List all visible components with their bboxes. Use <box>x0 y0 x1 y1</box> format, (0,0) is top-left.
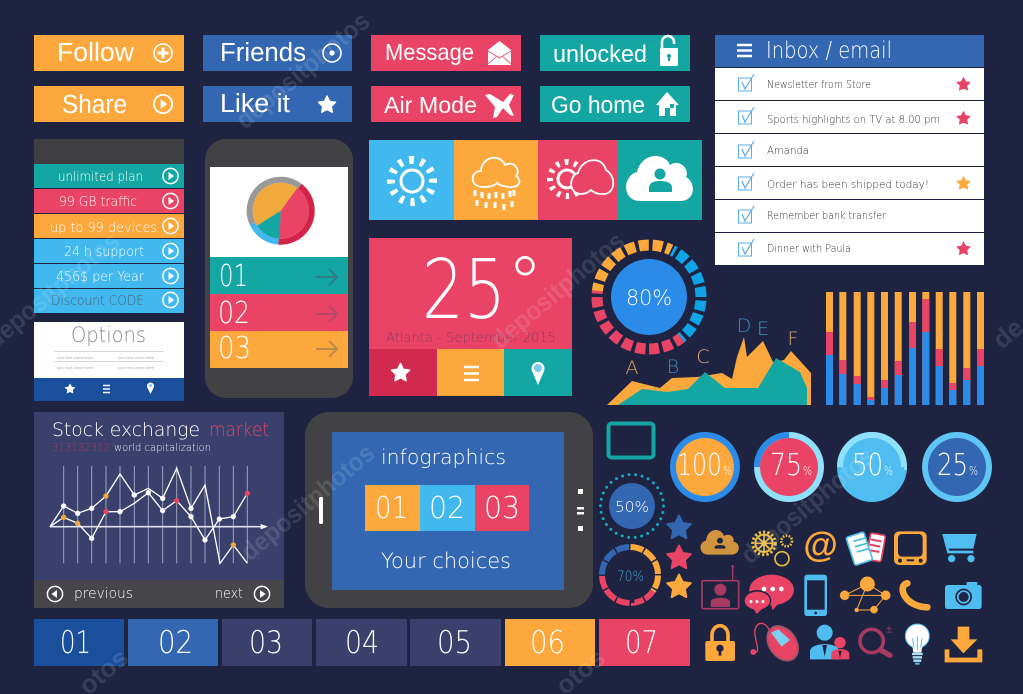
degree symbol: ° <box>507 241 543 325</box>
tab 04 <box>316 619 407 666</box>
tile: rain cloud <box>454 140 538 220</box>
tab 02 <box>128 619 218 666</box>
inbox header <box>715 35 984 67</box>
icon: tablet outline <box>608 424 654 458</box>
button: Like it: Like it <box>220 90 290 118</box>
icon: download <box>945 627 982 662</box>
plan row: 24 h support: 24 h support <box>64 245 144 260</box>
tile: user cloud <box>618 140 702 220</box>
stock footer navigation: previous <box>74 586 133 602</box>
tab 05: 05 <box>437 625 472 661</box>
icon: contact frame <box>702 565 739 609</box>
plan row: 99 GB traffic <box>34 189 184 213</box>
tab 01: 01 <box>60 625 91 661</box>
tab 06: 06 <box>530 625 565 661</box>
options small text: your text check here <box>118 365 155 370</box>
phone row 03: 03 <box>218 331 251 366</box>
gauge: 100 percent: % <box>723 464 732 478</box>
icon: business people <box>810 625 849 659</box>
phone row 02: 02 <box>218 296 250 331</box>
watermark text: depositphotos <box>735 441 880 570</box>
inbox row 2 <box>715 101 984 133</box>
icon: computer mouse <box>750 620 804 666</box>
tab 03 <box>222 619 312 666</box>
plan row: 456$ per Year <box>34 264 184 288</box>
phone row 01 <box>210 257 348 294</box>
tablet tile 02: 02 <box>429 491 465 526</box>
icon: shopping cart <box>935 534 977 562</box>
gauge label: 80% <box>626 286 672 310</box>
inbox row 3 <box>715 134 984 166</box>
tablet tile 03 <box>475 485 529 531</box>
plan row: up to 99 devices <box>34 214 184 238</box>
button: Follow <box>34 35 184 71</box>
inbox header: Inbox / email <box>766 38 892 64</box>
stock subtitle: world capitalization <box>114 442 211 454</box>
plan row: 24 h support <box>34 239 184 263</box>
button: Message: Message <box>385 39 474 65</box>
stock title <box>52 419 269 441</box>
gauge: 50 percent: % <box>884 464 893 478</box>
button: Friends <box>203 35 352 71</box>
tablet heading: infographics <box>381 445 506 469</box>
icon: smartphone <box>804 575 827 616</box>
icon: magnifier: ± <box>886 624 892 636</box>
tile: sun <box>369 140 454 220</box>
inbox row 6 <box>715 233 984 265</box>
button: Go home: Go home <box>551 92 645 119</box>
tab 03: 03 <box>249 625 283 661</box>
phone row 02 <box>210 294 348 331</box>
icon: speech bubbles <box>743 575 794 614</box>
options heading: Options <box>71 323 146 347</box>
tablet mockup <box>305 412 593 608</box>
icon: at sign: @ <box>803 525 838 564</box>
tablet tile 02 <box>420 485 475 531</box>
plan row: Discount CODE: Discount CODE <box>51 294 144 309</box>
button: Share: Share <box>62 91 127 119</box>
inbox row 5 <box>715 200 984 232</box>
panel: temperature card <box>369 238 572 396</box>
phone row 03 <box>210 331 348 368</box>
inbox row 1: Newsletter from Store <box>767 78 871 91</box>
watermark text: depositphotos <box>235 438 380 567</box>
tile: sun and cloud <box>538 140 618 220</box>
icon: network <box>840 577 890 613</box>
plan row: 99 GB traffic: 99 GB traffic <box>59 195 137 210</box>
tab 04: 04 <box>345 625 379 661</box>
phone mockup <box>205 139 353 398</box>
watermark text: depositphotos <box>485 226 630 355</box>
tab 05 <box>410 619 501 666</box>
tablet tile 01: 01 <box>375 491 408 526</box>
gauge: 50 percent <box>837 432 907 502</box>
chart letters: E <box>757 318 769 340</box>
gauge: 70 percent segmented: 70% <box>617 569 644 585</box>
tab 01 <box>34 619 124 666</box>
inbox row 1 <box>715 68 984 100</box>
tab 06 <box>505 619 595 666</box>
chart letters: C <box>696 346 710 368</box>
options small text: your text check here <box>118 355 155 360</box>
icon: gears <box>753 532 792 566</box>
button: Share <box>34 86 184 122</box>
stock footer navigation <box>34 580 284 608</box>
gauge: 25 percent: % <box>969 464 978 478</box>
temperature value: 25 <box>422 243 506 338</box>
options small text: your text check here <box>57 355 94 360</box>
gauge: 75 percent <box>754 432 824 502</box>
plan row: up to 99 devices: up to 99 devices <box>50 221 157 236</box>
inbox row 5: Remember bank transfer <box>767 209 886 222</box>
inbox row 2: Sports highlights on TV at 8.00 pm <box>767 113 940 126</box>
stock title: market <box>209 419 269 441</box>
chart letters: F <box>788 328 798 350</box>
gauge: 50 percent: 50 <box>852 448 883 483</box>
pie chart <box>237 167 324 254</box>
gauge: 100 percent <box>670 432 740 502</box>
icon: phone handset <box>903 583 927 607</box>
stock subtitle: 313132312 <box>52 442 110 454</box>
gauge: 70 percent segmented <box>591 536 669 614</box>
button: unlocked <box>540 35 690 71</box>
plan row: unlimited plan <box>34 164 184 188</box>
button: Friends: Friends <box>220 39 306 67</box>
tab 07: 07 <box>625 625 658 661</box>
stacked bar chart <box>826 292 984 405</box>
button: Follow: Follow <box>57 39 135 67</box>
button: Like it <box>203 86 352 122</box>
plan row: Discount CODE <box>34 289 184 313</box>
chart letters: A <box>626 357 638 379</box>
stock title: Stock exchange <box>52 419 200 441</box>
stock subtitle <box>52 442 211 454</box>
inbox row 6: Dinner with Paula <box>767 242 851 255</box>
options nav bar <box>34 378 184 401</box>
options small text: your text check here <box>57 365 94 370</box>
plan row: 456$ per Year: 456$ per Year <box>56 270 145 285</box>
tile: star <box>369 349 437 396</box>
button: Air Mode: Air Mode <box>384 92 477 118</box>
donut gauge 80 percent <box>576 224 722 370</box>
area chart <box>607 315 811 405</box>
gauge: 25 percent: 25 <box>937 448 968 483</box>
button: unlocked: unlocked <box>553 41 647 68</box>
gauge: 75 percent: % <box>803 464 812 478</box>
inbox row 4 <box>715 167 984 199</box>
icon: retro tv <box>894 531 927 565</box>
gauge: 50 percent dotted: 50% <box>615 498 649 516</box>
tablet tile 03: 03 <box>484 491 520 526</box>
tablet caption: Your choices <box>381 549 511 573</box>
inbox row 4: Order has been shipped today! <box>767 178 929 191</box>
panel: options <box>34 322 184 401</box>
weather tiles <box>369 140 702 220</box>
tablet tile 01 <box>365 485 420 531</box>
tile: map pin <box>504 349 572 396</box>
tab 07 <box>599 619 690 666</box>
icon: camera <box>945 582 982 609</box>
icon: three stars <box>667 516 691 597</box>
gauge: 75 percent: 75 <box>770 448 802 483</box>
tab 02: 02 <box>158 625 193 661</box>
gauge: 25 percent <box>922 432 992 502</box>
watermark text: depositphotos <box>230 6 375 135</box>
plan row: unlimited plan: unlimited plan <box>58 170 143 185</box>
location and date: Atlanta - September 2015 <box>386 330 556 346</box>
icon: padlock <box>705 626 735 661</box>
panel: stock exchange market <box>34 412 284 608</box>
chart letters: B <box>667 356 679 378</box>
chart letters <box>626 315 798 379</box>
icon: light bulb <box>905 624 929 664</box>
button: Message <box>371 35 521 71</box>
chart letters: D <box>737 315 751 337</box>
phone row 01: 01 <box>219 259 248 294</box>
line chart <box>50 466 268 563</box>
button: Go home <box>540 86 690 122</box>
gauge: 100 percent: 100 <box>677 448 722 483</box>
icon: documents <box>846 532 886 565</box>
gauge: 50 percent dotted <box>600 474 664 538</box>
inbox row 3: Amanda <box>767 144 809 157</box>
icon grid <box>701 525 982 666</box>
panel: pricing plan list <box>34 139 184 313</box>
numbered tab row <box>34 619 690 666</box>
icon: user cloud <box>701 530 739 555</box>
options small text <box>57 355 155 370</box>
stock footer navigation: next <box>215 586 243 602</box>
icon: magnifier <box>860 624 892 655</box>
panel: inbox email list <box>715 35 984 265</box>
tile: menu <box>437 349 504 396</box>
button: Air Mode <box>371 86 521 122</box>
